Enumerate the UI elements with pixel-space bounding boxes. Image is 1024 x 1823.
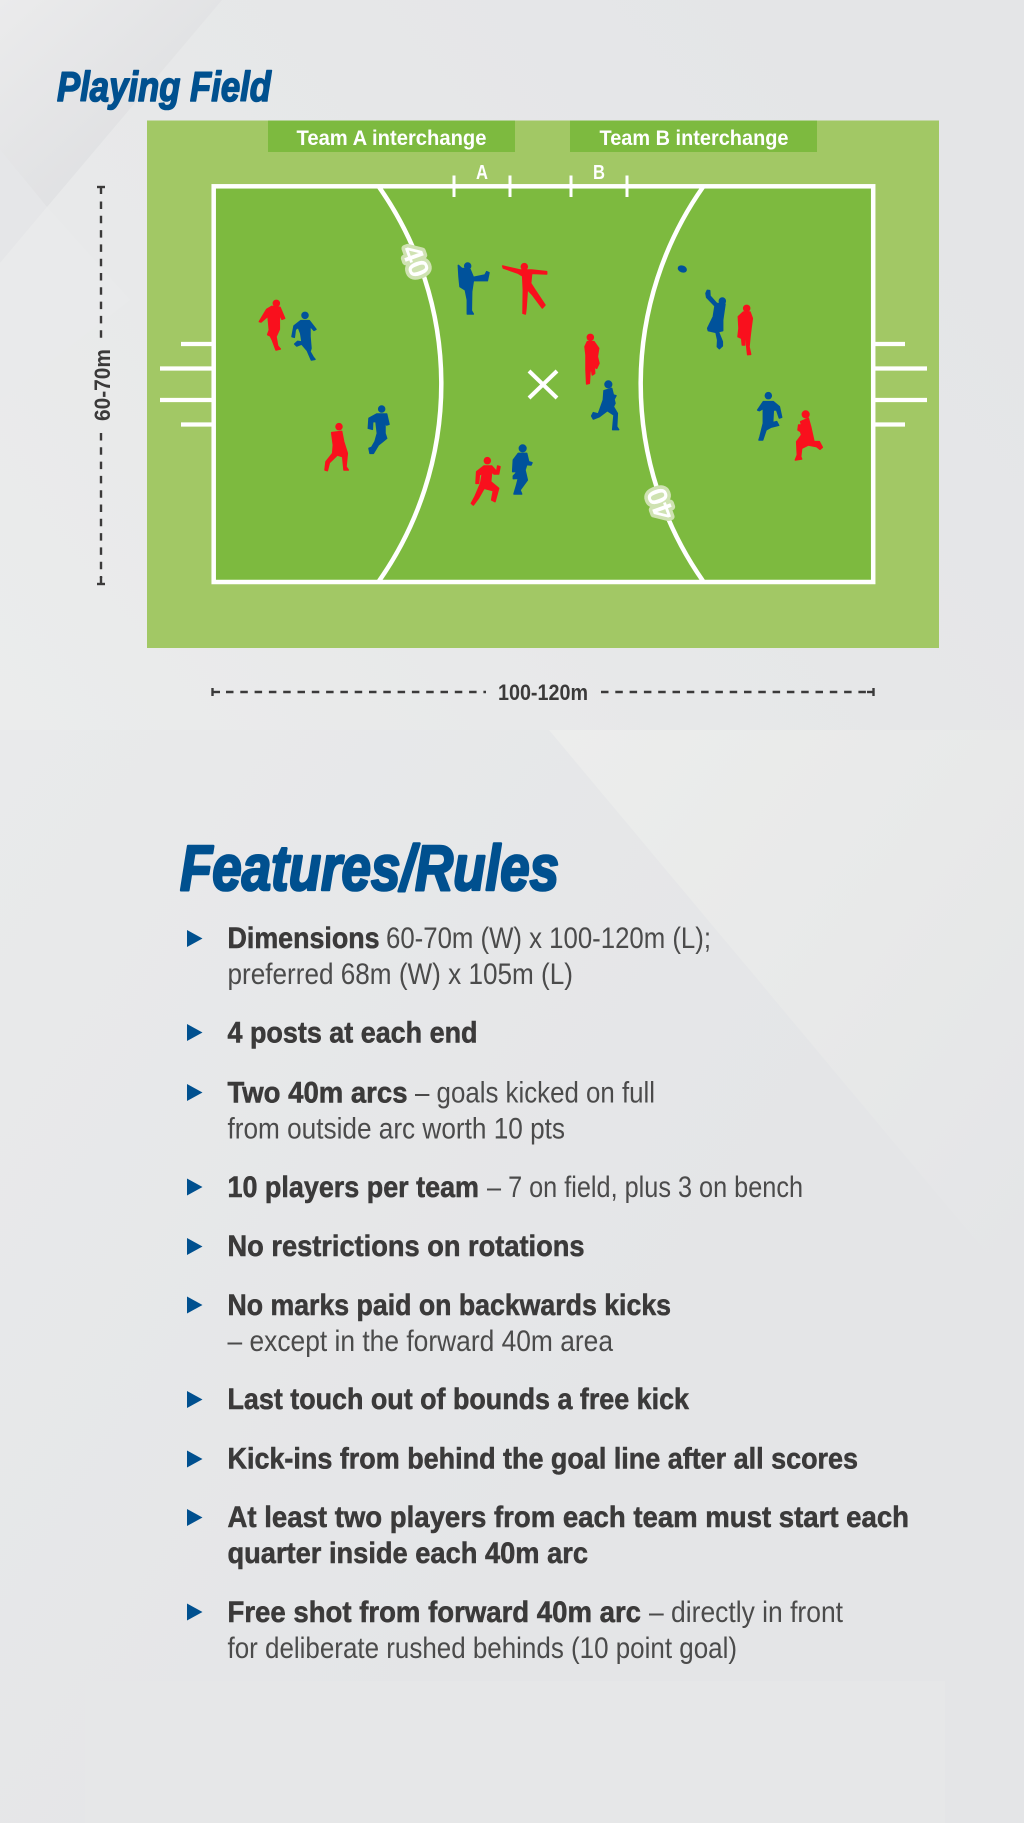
heading: Features/Rules: Features/Rules — [180, 832, 559, 904]
rule: start positions: At least two players from each team must start each — [228, 1501, 909, 1534]
red player arms wide — [503, 264, 547, 314]
rule: dimensions: 60-70m (W) x 100-120m (L); — [386, 922, 711, 955]
interchange gates — [454, 176, 627, 197]
dimension: field length: 100-120m — [498, 680, 588, 705]
heading: Playing Field: Playing Field — [57, 63, 272, 110]
red player 4 — [738, 305, 752, 355]
rule: arcs: Two 40m arcs — [228, 1076, 408, 1110]
Team B interchange box — [570, 120, 817, 152]
rule: free shot: – directly in front — [649, 1596, 844, 1629]
players right half — [585, 265, 822, 460]
rule: posts: 4 posts at each end — [228, 1016, 478, 1050]
rule: players: – 7 on field, plus 3 on bench — [487, 1171, 803, 1204]
rule: marks — [187, 1289, 671, 1358]
rule: free shot: for deliberate rushed behinds (10 point goal) — [228, 1632, 737, 1665]
rule: arcs — [187, 1076, 655, 1146]
left 40m arc — [379, 187, 441, 581]
rule: start positions — [187, 1501, 909, 1570]
rule: marks: No marks paid on backwards kicks — [228, 1289, 671, 1322]
dimension: field width: 60-70m — [90, 349, 115, 421]
blue player 2 — [368, 406, 389, 453]
rule: kick-ins: Kick-ins from behind the goal line after all scores — [228, 1442, 858, 1476]
rule: players: 10 players per team — [228, 1171, 479, 1204]
rule: arcs: – goals kicked on full — [415, 1076, 655, 1110]
rule: start positions: quarter inside each 40m arc — [228, 1537, 588, 1570]
outer field surround — [147, 120, 939, 648]
rule: arcs: from outside arc worth 10 pts — [228, 1112, 565, 1146]
Team A interchange box — [268, 120, 515, 152]
rule: free shot — [187, 1596, 844, 1665]
red player 6 — [795, 411, 822, 460]
right goal posts — [875, 344, 927, 424]
rule: dimensions: preferred 68m (W) x 105m (L) — [228, 958, 573, 991]
blue player 4 — [592, 381, 619, 430]
red player 3 — [471, 458, 500, 505]
background: lower panel — [0, 730, 1024, 1823]
ball — [678, 265, 687, 273]
blue kicker — [458, 263, 489, 314]
gate label A: A — [476, 162, 488, 184]
blue player 3 — [513, 445, 532, 494]
Team B interchange box: Team B interchange — [600, 126, 789, 150]
red player 2 — [325, 424, 348, 471]
background: top panel — [0, 0, 1024, 730]
right 40m arc — [641, 187, 703, 581]
blue player 1 — [292, 312, 316, 360]
rule: marks: – except in the forward 40m area — [228, 1325, 613, 1358]
right 40 marker: 40 — [640, 483, 681, 524]
left goal posts — [160, 344, 212, 424]
centre cross — [529, 371, 557, 398]
Team A interchange box: Team A interchange — [296, 126, 487, 150]
blue catcher — [706, 290, 725, 349]
players left half — [259, 263, 547, 505]
rule: rotations: No restrictions on rotations — [228, 1230, 584, 1263]
rule: players — [187, 1171, 803, 1204]
rule: dimensions: Dimensions — [228, 922, 380, 955]
blue player 5 — [758, 393, 782, 440]
rules list — [187, 922, 909, 1665]
left 40 marker: 40 — [395, 241, 436, 282]
rule: dimensions — [187, 922, 711, 991]
playing field diagram — [147, 120, 939, 648]
gate label B: B — [593, 162, 605, 184]
red player 1 — [259, 300, 285, 350]
red player 5 — [585, 334, 599, 384]
field of play — [214, 186, 873, 582]
rule: out of bounds: Last touch out of bounds a free kick — [228, 1383, 689, 1416]
rule: free shot: Free shot from forward 40m arc — [228, 1596, 641, 1629]
